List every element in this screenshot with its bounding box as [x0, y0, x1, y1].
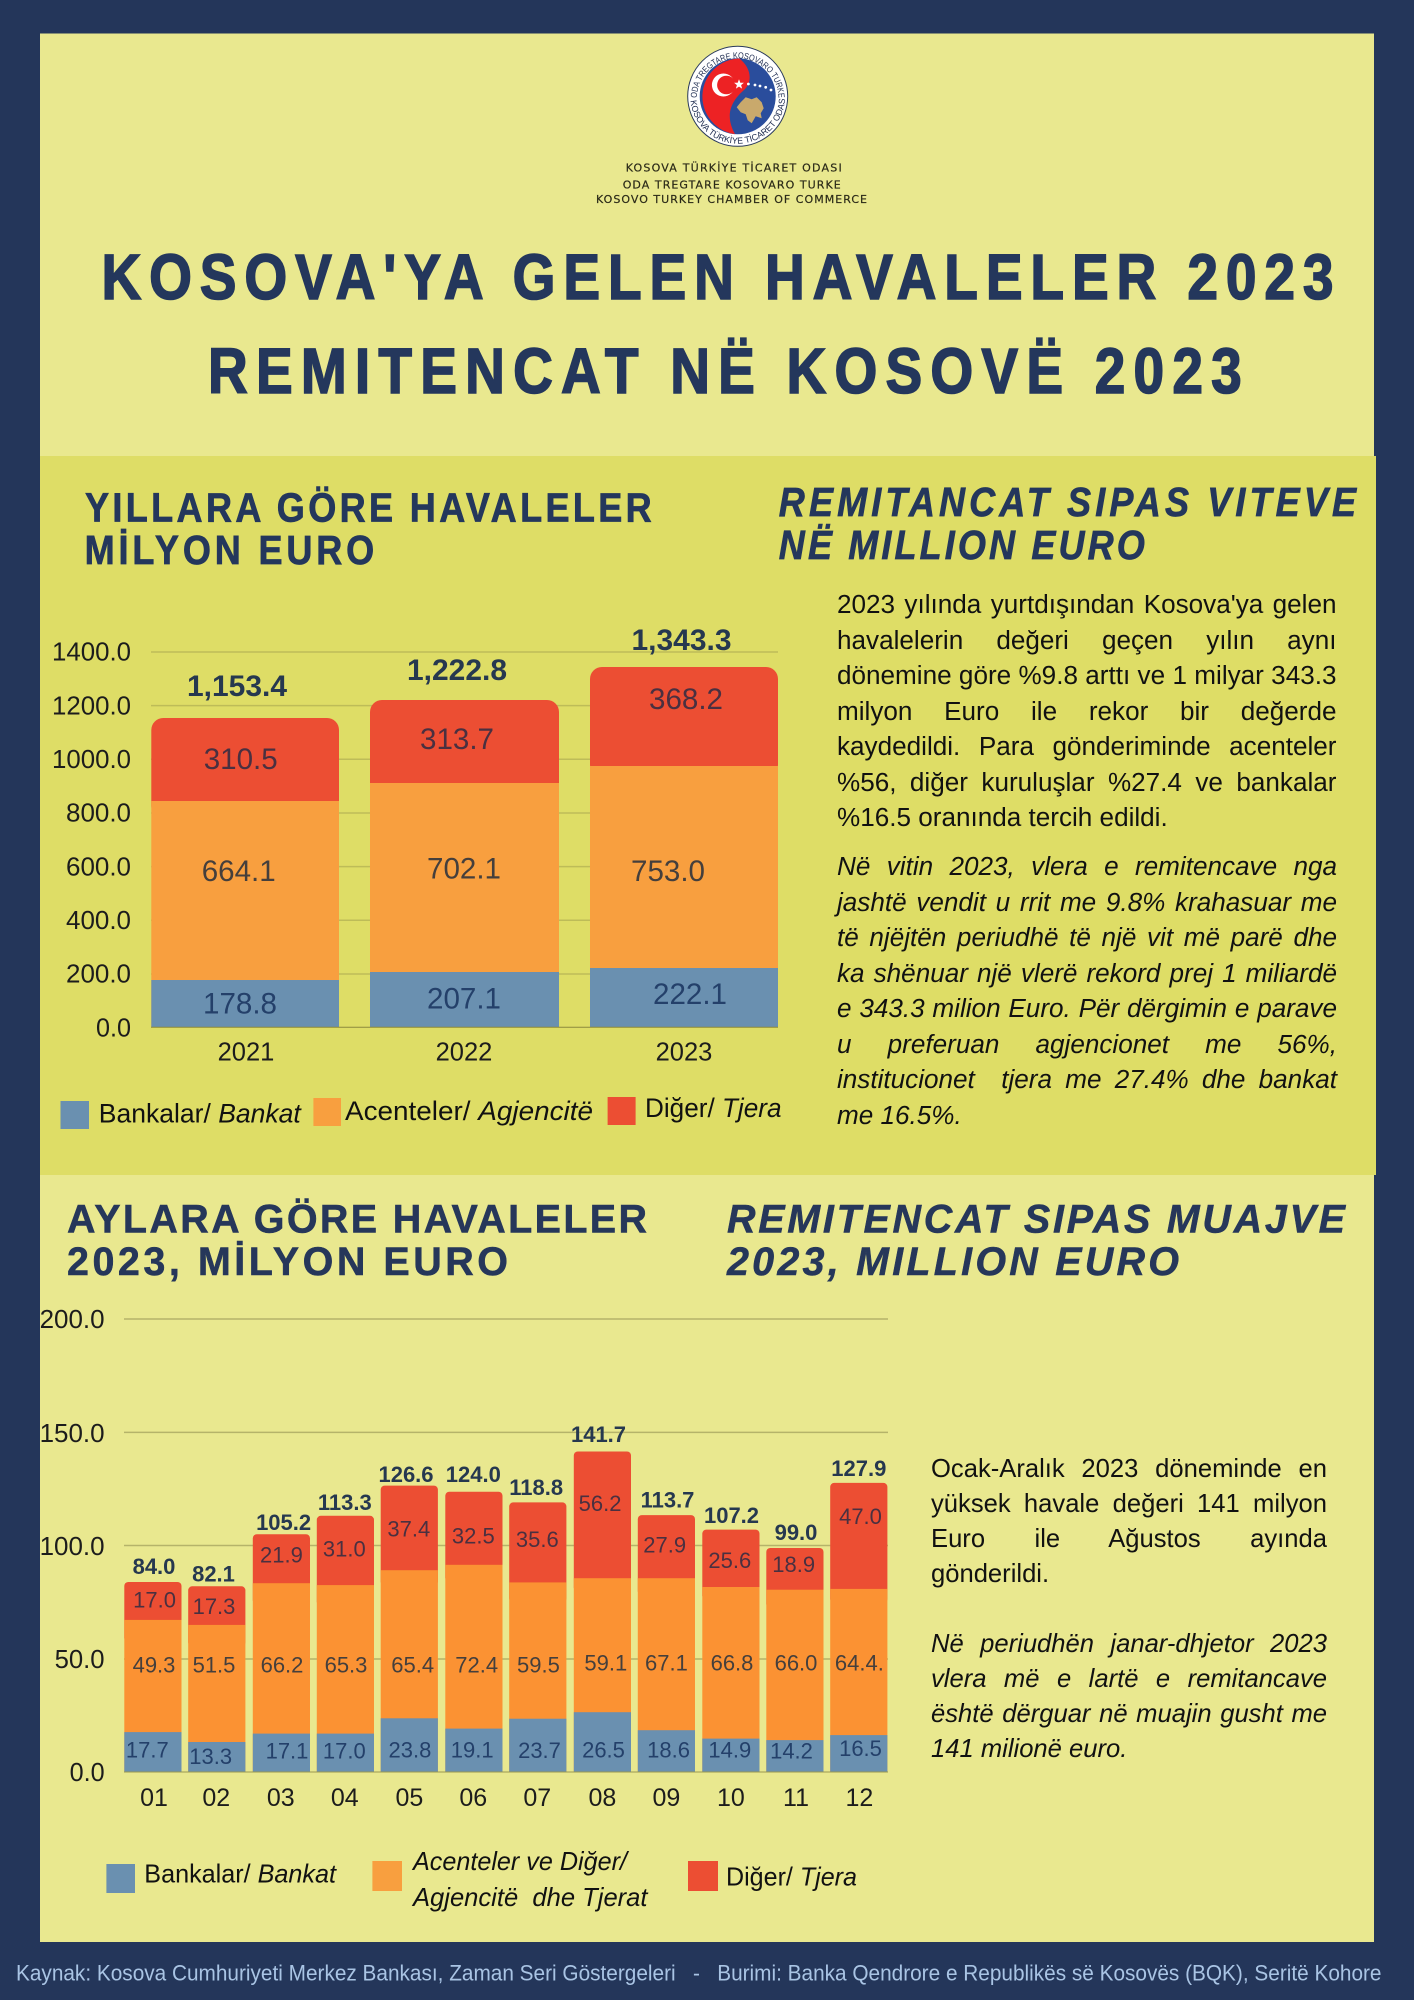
segment values — [202, 683, 727, 1021]
logo: chamber of commerce seal — [687, 46, 788, 147]
text block: yearly summary, Turkish — [837, 589, 1336, 832]
red values: 35.6 — [516, 1527, 559, 1552]
heading: yearly remittances, Turkish: MİLYON EURO — [85, 528, 374, 574]
orange values: 67.1 — [645, 1650, 688, 1676]
segment values: 702.1 — [427, 853, 501, 886]
x axis months: 03 — [267, 1784, 295, 1812]
monthly totals: 126.6 — [378, 1462, 434, 1487]
x axis years: 2022 — [436, 1039, 492, 1067]
monthly totals — [133, 1422, 886, 1586]
x axis years: 2021 — [218, 1039, 274, 1067]
segment values: 207.1 — [427, 983, 501, 1016]
heading: yearly remittances, Turkish: YILLARA GÖRE HAVALELER — [85, 486, 652, 531]
text block: monthly summary, Albanian: vlera më e lartë e remitancave — [931, 1665, 1327, 1693]
monthly totals: 107.2 — [704, 1503, 759, 1528]
title — [101, 241, 1334, 407]
text block: yearly summary, Albanian — [834, 851, 1338, 1130]
x axis months: 11 — [783, 1784, 809, 1812]
y axis labels: 200.0 — [40, 1304, 105, 1334]
text block: yearly summary, Albanian: jashtë vendit u rrit me 9.8% krahasuar me — [837, 887, 1337, 917]
heading: monthly remittances, Albanian: REMITENCAT SIPAS MUAJVE — [727, 1198, 1347, 1242]
monthly totals: 105.2 — [256, 1510, 311, 1535]
y axis labels — [52, 637, 131, 1042]
y axis labels: 600.0 — [66, 851, 131, 881]
y axis labels: 150.0 — [40, 1418, 105, 1448]
blue values: 17.0 — [323, 1738, 366, 1764]
y axis labels — [40, 1304, 105, 1787]
blue values: 14.9 — [708, 1737, 751, 1762]
y axis labels: 200.0 — [66, 959, 131, 989]
bar 2021 — [151, 718, 339, 1027]
text block: yearly summary, Turkish: %16.5 oranında tercih edildi. — [837, 802, 1168, 832]
blue values: 23.7 — [518, 1738, 561, 1763]
monthly chart legend: Bankalar/ Bankat — [144, 1859, 338, 1889]
segment values: 178.8 — [203, 988, 277, 1021]
yearly chart legend — [60, 1093, 782, 1129]
monthly totals: 113.7 — [641, 1487, 694, 1512]
segment values: 368.2 — [649, 683, 723, 716]
x axis months: 09 — [652, 1784, 680, 1812]
monthly totals: 113.3 — [318, 1490, 372, 1515]
heading: monthly remittances, Albanian — [726, 1198, 1347, 1284]
orange values: 59.5 — [517, 1652, 560, 1677]
x axis years: 2023 — [656, 1039, 712, 1067]
x axis months — [140, 1784, 873, 1812]
blue values: 19.1 — [451, 1737, 494, 1762]
x axis years — [218, 1039, 712, 1067]
organisation name: KOSOVO TURKEY CHAMBER OF COMMERCE — [596, 193, 867, 206]
text block: monthly summary, Turkish: Ocak-Aralık 2023 döneminde en — [931, 1454, 1327, 1482]
title: KOSOVA'YA GELEN HAVALELER 2023 — [101, 241, 1334, 313]
organisation name: KOSOVA TÜRKİYE TİCARET ODASI — [626, 162, 842, 175]
x axis months: 06 — [459, 1784, 487, 1812]
heading: yearly remittances, Turkish — [85, 486, 652, 574]
x axis months: 12 — [845, 1784, 873, 1812]
monthly chart legend: Acenteler ve Diğer/ — [411, 1846, 630, 1876]
logo: chamber of commerce seal: KOSOVA TÜRKİYE TİCARET ODASI — [690, 98, 785, 144]
text block: monthly summary, Turkish: Euro ile Ağustos ayında — [931, 1525, 1327, 1553]
text block: yearly summary, Albanian: Në vitin 2023, vlera e remitencave nga — [837, 851, 1337, 881]
blue values: 18.6 — [647, 1737, 690, 1762]
text block: monthly summary, Albanian: është dërguar në muajin gusht me — [931, 1700, 1327, 1728]
red segments: other — [124, 1452, 887, 1646]
monthly totals: 82.1 — [192, 1561, 235, 1586]
text block: monthly summary, Turkish: yüksek havale değeri 141 milyon — [931, 1490, 1327, 1518]
text block: yearly summary, Albanian: me 16.5%. — [837, 1100, 962, 1130]
blue segments: banks — [124, 1712, 887, 1772]
text block: yearly summary, Albanian: u preferuan agjencionet me 56%, — [837, 1029, 1337, 1059]
blue values: 23.8 — [388, 1737, 431, 1762]
text block: yearly summary, Turkish: %56, diğer kuruluşlar %27.4 ve bankalar — [837, 767, 1336, 797]
segment values: 310.5 — [204, 743, 278, 776]
x axis months: 04 — [331, 1784, 359, 1812]
x axis months: 01 — [140, 1784, 168, 1812]
totals: 1,222.8 — [407, 654, 507, 687]
text block: yearly summary, Albanian: e 343.3 milion Euro. Për dërgimin e parave — [837, 993, 1337, 1023]
segment values: 313.7 — [420, 723, 494, 756]
x axis months: 07 — [523, 1784, 551, 1812]
text block: yearly summary, Turkish: dönemine göre %9.8 arttı ve 1 milyar 343.3 — [837, 660, 1336, 690]
yearly section band — [40, 456, 1376, 1175]
heading: monthly remittances, Turkish: 2023, MİLYON EURO — [67, 1240, 508, 1284]
orange values: 66.0 — [775, 1650, 817, 1676]
text block: yearly summary, Turkish: 2023 yılında yurtdışından Kosova'ya gelen — [837, 589, 1336, 619]
monthly totals: 141.7 — [571, 1422, 626, 1447]
red values: 37.4 — [387, 1516, 430, 1542]
y axis labels: 800.0 — [66, 798, 131, 828]
orange values: 66.2 — [261, 1652, 303, 1677]
orange values: 59.1 — [584, 1650, 627, 1676]
text block: yearly summary, Albanian: institucionet tjera me 27.4% dhe bankat — [837, 1064, 1337, 1094]
segment values: 222.1 — [653, 978, 727, 1011]
y axis labels: 1000.0 — [52, 744, 131, 774]
monthly totals: 124.0 — [446, 1462, 501, 1487]
monthly stacked bar chart — [40, 1304, 888, 1812]
red values: 56.2 — [579, 1491, 622, 1516]
text block: yearly summary, Turkish: milyon Euro ile rekor bir değerde — [837, 696, 1336, 726]
blue values: 13.3 — [189, 1744, 232, 1769]
orange values — [133, 1650, 884, 1677]
segment values: 753.0 — [631, 855, 705, 888]
monthly totals: 99.0 — [775, 1520, 817, 1545]
orange values: 65.3 — [325, 1652, 367, 1677]
bar 2022 — [370, 700, 559, 1027]
red values — [133, 1491, 882, 1619]
orange values: 66.8 — [711, 1650, 753, 1676]
bar 2023 — [590, 667, 778, 1027]
yearly chart legend: Diğer/ Tjera — [645, 1093, 782, 1123]
heading: monthly remittances, Turkish: AYLARA GÖRE HAVALELER — [67, 1198, 647, 1242]
text block: yearly summary, Turkish: kaydedildi. Para gönderiminde acenteler — [837, 731, 1336, 761]
orange values: 72.4 — [455, 1652, 498, 1677]
heading: monthly remittances, Albanian: 2023, MILLION EURO — [726, 1240, 1179, 1284]
x axis months: 08 — [588, 1784, 616, 1812]
monthly chart legend — [106, 1846, 857, 1912]
blue values: 17.1 — [266, 1738, 308, 1764]
y axis labels: 400.0 — [66, 905, 131, 935]
title: REMITENCAT NË KOSOVË 2023 — [208, 335, 1242, 407]
monthly totals: 84.0 — [133, 1554, 175, 1579]
y axis labels: 50.0 — [55, 1644, 105, 1674]
yearly chart legend: Acenteler/ Agjencitë — [345, 1096, 593, 1126]
organisation name: ODA TREGTARE KOSOVARO TURKE — [623, 178, 841, 191]
text block: monthly summary, Albanian: Në periudhën janar-dhjetor 2023 — [931, 1630, 1327, 1658]
heading: yearly remittances, Albanian: REMITANCAT SIPAS VITEVE — [779, 480, 1357, 526]
text block: monthly summary, Turkish: gönderildi. — [931, 1560, 1049, 1588]
yearly chart legend: Bankalar/ Bankat — [99, 1099, 302, 1129]
orange values: 51.5 — [193, 1652, 235, 1677]
heading: yearly remittances, Albanian: NË MILLION EURO — [779, 523, 1145, 569]
organisation name — [596, 162, 867, 206]
text block: monthly summary, Turkish — [931, 1454, 1327, 1588]
totals: 1,343.3 — [632, 624, 732, 657]
red values: 17.0 — [133, 1587, 176, 1612]
y axis labels: 1200.0 — [52, 690, 131, 720]
blue values: 14.2 — [770, 1738, 813, 1764]
text block: monthly summary, Albanian: 141 milionë euro. — [931, 1735, 1127, 1763]
blue values: 16.5 — [839, 1736, 882, 1761]
red values: 47.0 — [839, 1504, 882, 1529]
blue values: 17.7 — [126, 1737, 169, 1762]
red values: 31.0 — [323, 1536, 366, 1561]
monthly chart legend: Diğer/ Tjera — [726, 1862, 857, 1892]
red values: 27.9 — [643, 1533, 686, 1558]
red values: 32.5 — [452, 1523, 495, 1548]
totals — [187, 624, 732, 703]
text block: yearly summary, Albanian: të njëjtën periudhë të një vit më parë dhe — [837, 922, 1337, 952]
text block: yearly summary, Albanian: ka shënuar një vlerë rekord prej 1 miliardë — [837, 958, 1337, 988]
yearly stacked bar chart — [52, 624, 778, 1067]
orange segments: agencies — [124, 1565, 887, 1772]
totals: 1,153.4 — [187, 670, 287, 703]
monthly chart legend: Agjencitë dhe Tjerat — [411, 1882, 649, 1912]
red values: 21.9 — [260, 1542, 303, 1568]
red values: 25.6 — [708, 1548, 751, 1573]
x axis months: 10 — [717, 1784, 745, 1812]
text block: yearly summary, Turkish: havalelerin değeri geçen yılın aynı — [837, 625, 1336, 655]
segment values: 664.1 — [202, 855, 276, 888]
orange values: 65.4 — [391, 1652, 434, 1677]
y axis labels: 0.0 — [70, 1757, 105, 1787]
monthly totals: 127.9 — [831, 1456, 886, 1481]
blue values: 26.5 — [582, 1737, 625, 1762]
monthly totals: 118.8 — [509, 1475, 563, 1500]
x axis months: 05 — [395, 1784, 423, 1812]
orange values: 64.4. — [835, 1650, 884, 1676]
y axis labels: 1400.0 — [52, 637, 131, 667]
x axis months: 02 — [202, 1784, 230, 1812]
heading: yearly remittances, Albanian — [779, 480, 1357, 569]
text block: monthly summary, Albanian — [931, 1630, 1327, 1763]
blue values — [126, 1736, 882, 1769]
heading: monthly remittances, Turkish — [67, 1198, 647, 1284]
y axis labels: 0.0 — [96, 1012, 131, 1042]
logo: chamber of commerce seal: ODA TREGTARE KOSOVARO TURKE — [690, 52, 785, 98]
y axis labels: 100.0 — [40, 1531, 105, 1561]
red values: 18.9 — [772, 1552, 815, 1577]
red values: 17.3 — [193, 1594, 235, 1619]
orange values: 49.3 — [133, 1652, 175, 1677]
